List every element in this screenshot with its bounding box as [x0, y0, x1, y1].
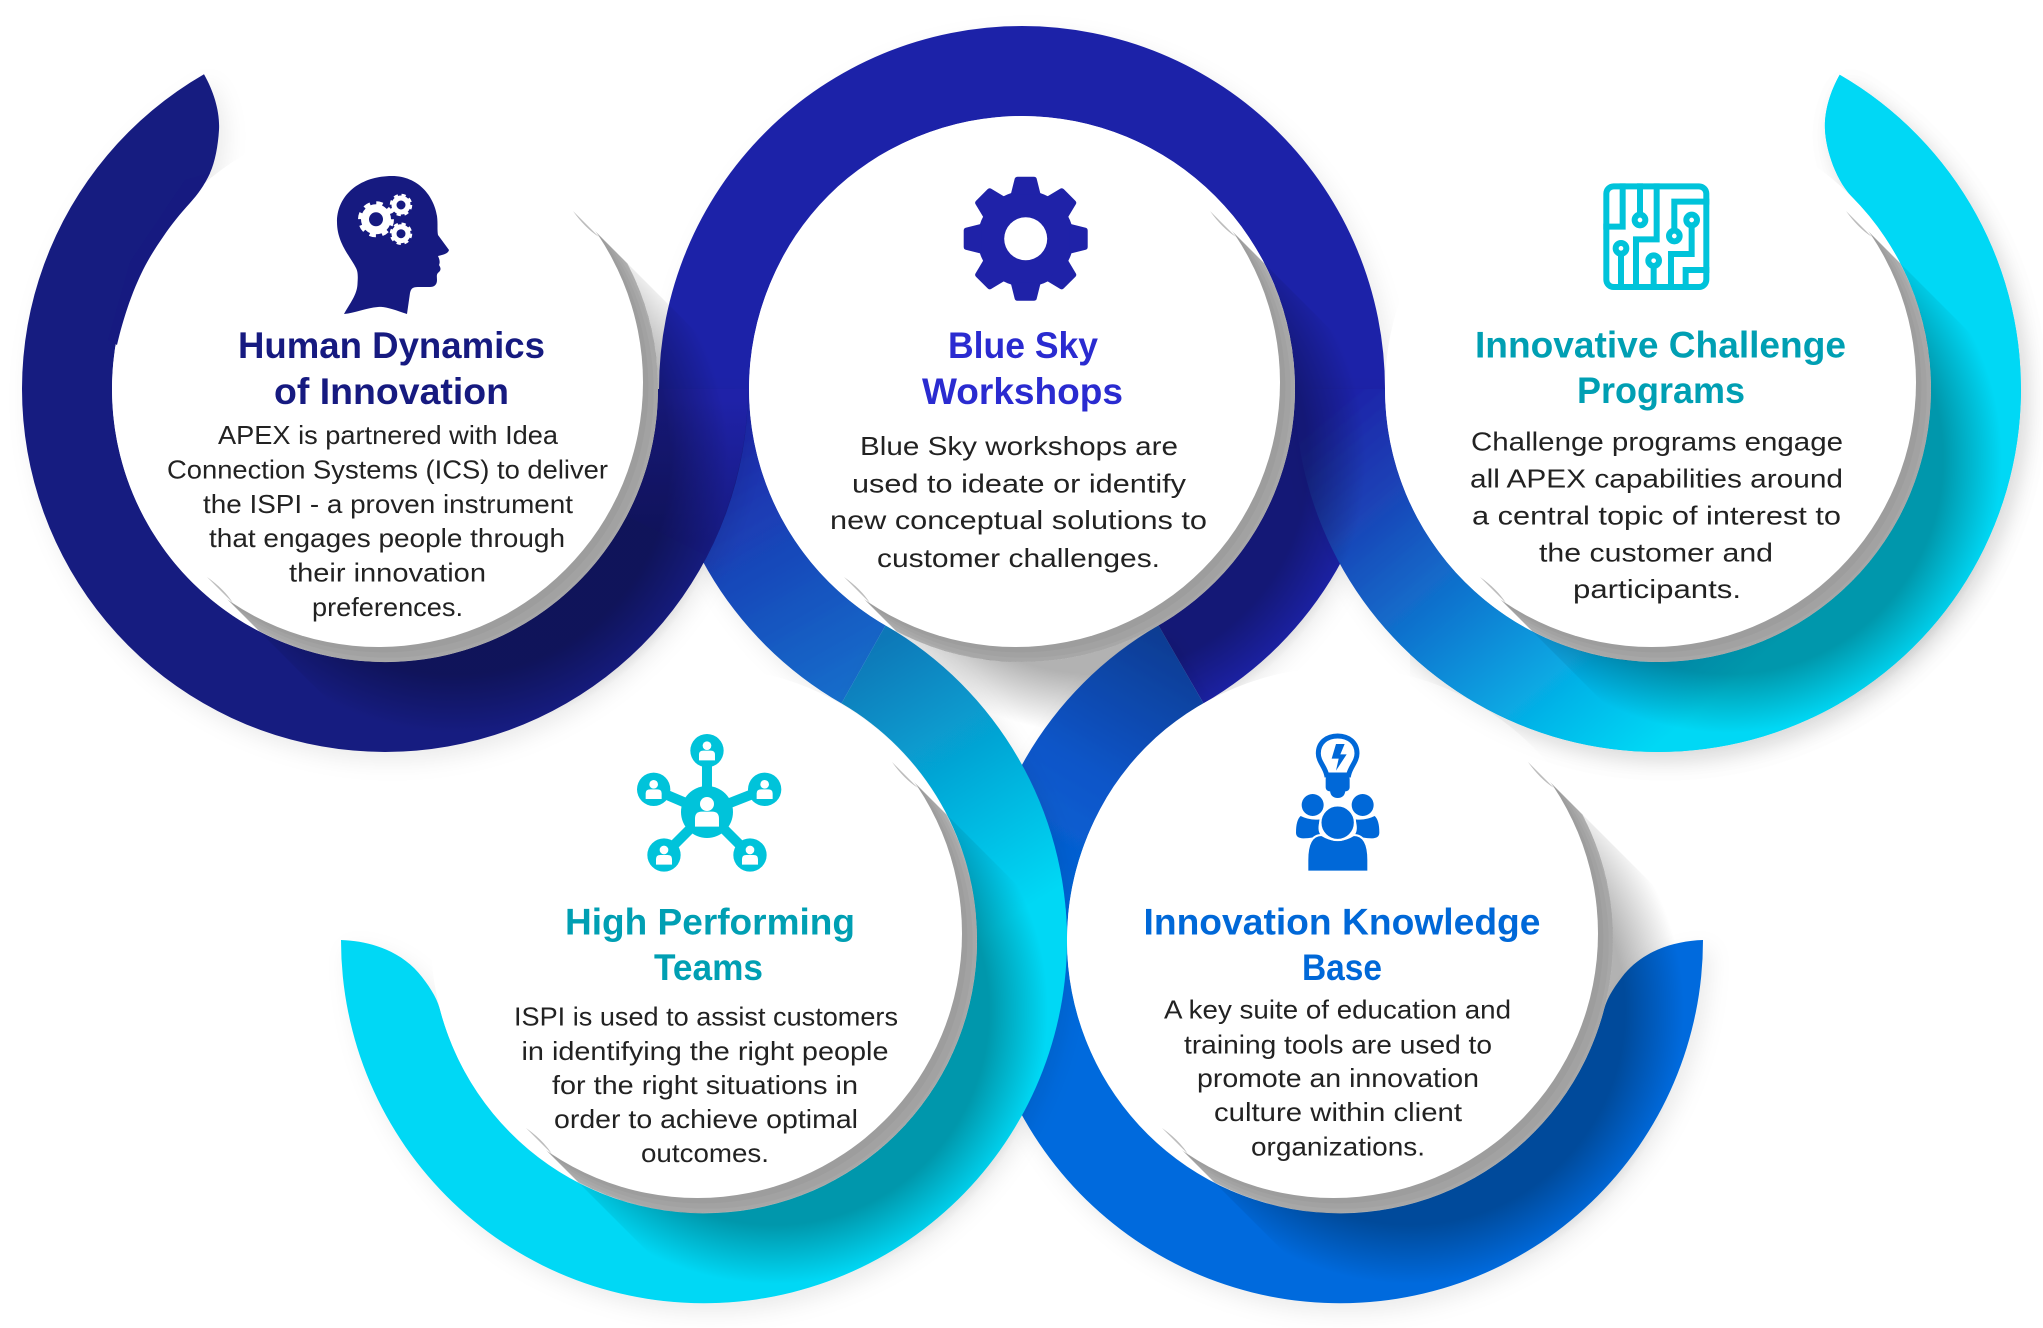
text: Challenge programs description: participants.	[1573, 574, 1741, 604]
text: Innovation Knowledge description: training tools are used to	[1184, 1029, 1492, 1059]
text: Human Dynamics description: their innovation	[289, 558, 486, 588]
text: High Performing description: in identifying the right people	[522, 1036, 888, 1066]
cast shadow of central circle	[898, 264, 1356, 723]
disc: High Performing circle	[431, 667, 1048, 1284]
text: Challenge programs description: all APEX capabilities around	[1470, 463, 1843, 493]
icon: people network	[637, 734, 781, 872]
heading: Human Dynamics of Innovation	[238, 325, 545, 412]
heading: Blue Sky Workshops: Blue Sky	[948, 325, 1098, 366]
text: Innovation Knowledge description: culture within client	[1214, 1097, 1463, 1127]
text: Human Dynamics description: APEX is partnered with Idea	[218, 420, 559, 450]
text: High Performing description: outcomes.	[641, 1138, 769, 1168]
text: Blue Sky description: used to ideate or identify	[852, 468, 1186, 498]
heading: Innovation Knowledge Base: Base	[1302, 947, 1382, 988]
text: Challenge programs description: the customer and	[1539, 538, 1773, 568]
left ring tip edge over disc	[108, 173, 210, 345]
heading: Blue Sky Workshops	[922, 325, 1123, 412]
text: Human Dynamics description: that engages people through	[209, 523, 565, 553]
heading: High Performing Teams: Teams	[654, 947, 763, 988]
cast shadow of right circle	[1534, 264, 1995, 726]
text: Blue Sky description	[830, 431, 1207, 573]
text: High Performing description: for the right situations in	[552, 1070, 858, 1100]
text: Challenge programs description	[1470, 427, 1843, 604]
text: Challenge programs description: a central topic of interest to	[1472, 501, 1841, 531]
panel: High Performing Teams	[514, 734, 898, 1168]
icon: circuit board	[1603, 183, 1709, 290]
text: High Performing description: order to achieve optimal	[554, 1104, 858, 1134]
icon: light bulb over team	[1296, 736, 1379, 872]
text: Innovation Knowledge description: A key suite of education and	[1164, 995, 1511, 1025]
heading: Human Dynamics of Innovation: of Innovation	[274, 371, 509, 412]
cast shadow of lower right circle	[1215, 814, 1676, 1276]
heading: Innovative Challenge Programs: Innovative Challenge	[1475, 325, 1846, 366]
heading: Blue Sky Workshops: Workshops	[922, 371, 1123, 412]
disc: Innovation Knowledge circle	[1067, 667, 1684, 1284]
text: Innovation Knowledge description: organizations.	[1251, 1131, 1425, 1161]
panel: Blue Sky Workshops	[749, 116, 1366, 733]
lower right ring: Innovation Knowledge band	[977, 625, 1703, 1303]
heading: Innovation Knowledge Base: Innovation Knowledge	[1144, 902, 1540, 943]
cast shadow of left circle	[260, 264, 718, 720]
text: Innovation Knowledge description: promote an innovation	[1197, 1063, 1479, 1093]
text: Human Dynamics description: preferences.	[312, 592, 463, 622]
cast shadow of lower left circle	[579, 816, 1041, 1277]
panel: Innovative Challenge Programs	[1385, 116, 2002, 733]
right ring: Innovative Challenge band	[1295, 75, 2021, 752]
heading: Innovation Knowledge Base	[1144, 902, 1540, 988]
text: Blue Sky description: customer challenges.	[877, 543, 1160, 573]
right ring: lower right portion above the knowledge circle	[1410, 74, 2030, 763]
heading: Human Dynamics of Innovation: Human Dynamics	[238, 325, 545, 366]
heading: High Performing Teams: High Performing	[565, 902, 855, 943]
heading: Innovative Challenge Programs	[1475, 325, 1846, 411]
icon: gear	[964, 177, 1088, 301]
heading: Innovative Challenge Programs: Programs	[1577, 370, 1745, 411]
panel: Innovation Knowledge Base	[1144, 736, 1540, 1161]
central ring: Blue Sky band	[659, 26, 1385, 703]
text: Blue Sky description: Blue Sky workshops are	[860, 431, 1178, 461]
lower left ring: High Performing band	[341, 625, 1067, 1303]
text: High Performing description: ISPI is used to assist customers	[514, 1001, 898, 1031]
icon: head with gears	[337, 176, 449, 314]
left ring: Human Dynamics band	[22, 74, 748, 752]
panel: Human Dynamics of Innovation	[108, 116, 729, 733]
text: Innovation Knowledge description	[1164, 995, 1511, 1161]
text: Human Dynamics description: the ISPI - a proven instrument	[203, 489, 574, 519]
text: High Performing description	[514, 1001, 898, 1168]
heading: High Performing Teams	[565, 902, 855, 988]
text: Challenge programs description: Challenge programs engage	[1471, 427, 1843, 457]
text: Human Dynamics description: Connection Systems (ICS) to deliver	[167, 455, 608, 485]
text: Blue Sky description: new conceptual solutions to	[830, 505, 1207, 535]
text: Human Dynamics description	[167, 420, 608, 622]
